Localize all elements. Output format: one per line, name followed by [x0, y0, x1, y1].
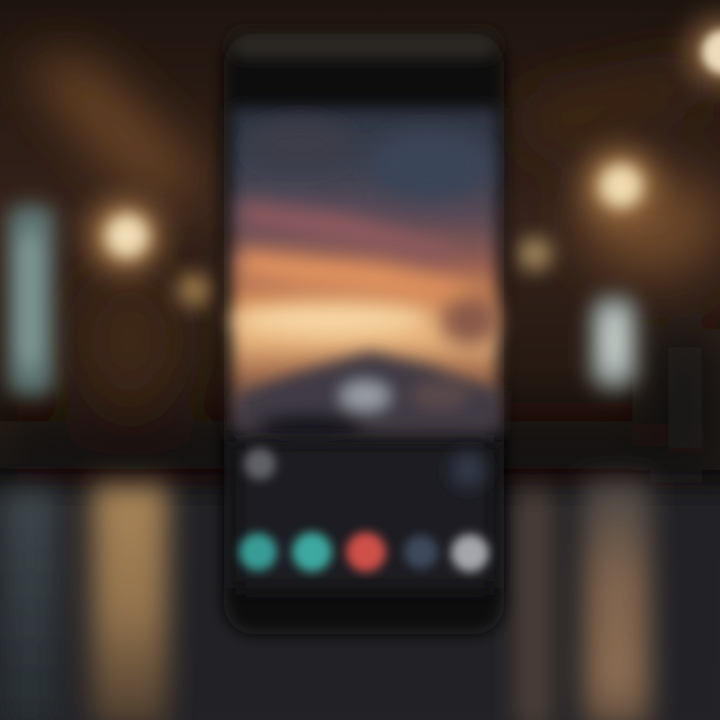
button: red	[346, 532, 386, 572]
phone screen	[230, 108, 500, 588]
lower screen	[236, 442, 494, 588]
mountains	[240, 352, 498, 437]
floor reflections	[2, 480, 650, 720]
ceiling and warm walls	[0, 60, 720, 470]
phone top edge	[232, 34, 496, 58]
light: left large	[87, 198, 163, 274]
app icon: dim	[450, 452, 486, 488]
light: left small	[177, 273, 211, 307]
phone	[224, 34, 504, 634]
light: right small	[518, 237, 552, 271]
light: top right corner	[688, 18, 720, 86]
floor	[0, 490, 720, 720]
sunset clouds	[230, 121, 500, 346]
window: right	[590, 295, 638, 390]
window: left	[8, 205, 54, 395]
button: light grey	[451, 534, 489, 572]
phone body	[224, 34, 504, 634]
button: slate	[404, 535, 438, 569]
light: right large	[582, 148, 658, 224]
button: teal 1	[239, 533, 277, 571]
app icon: grey	[244, 448, 276, 480]
button: teal 2	[292, 532, 332, 572]
